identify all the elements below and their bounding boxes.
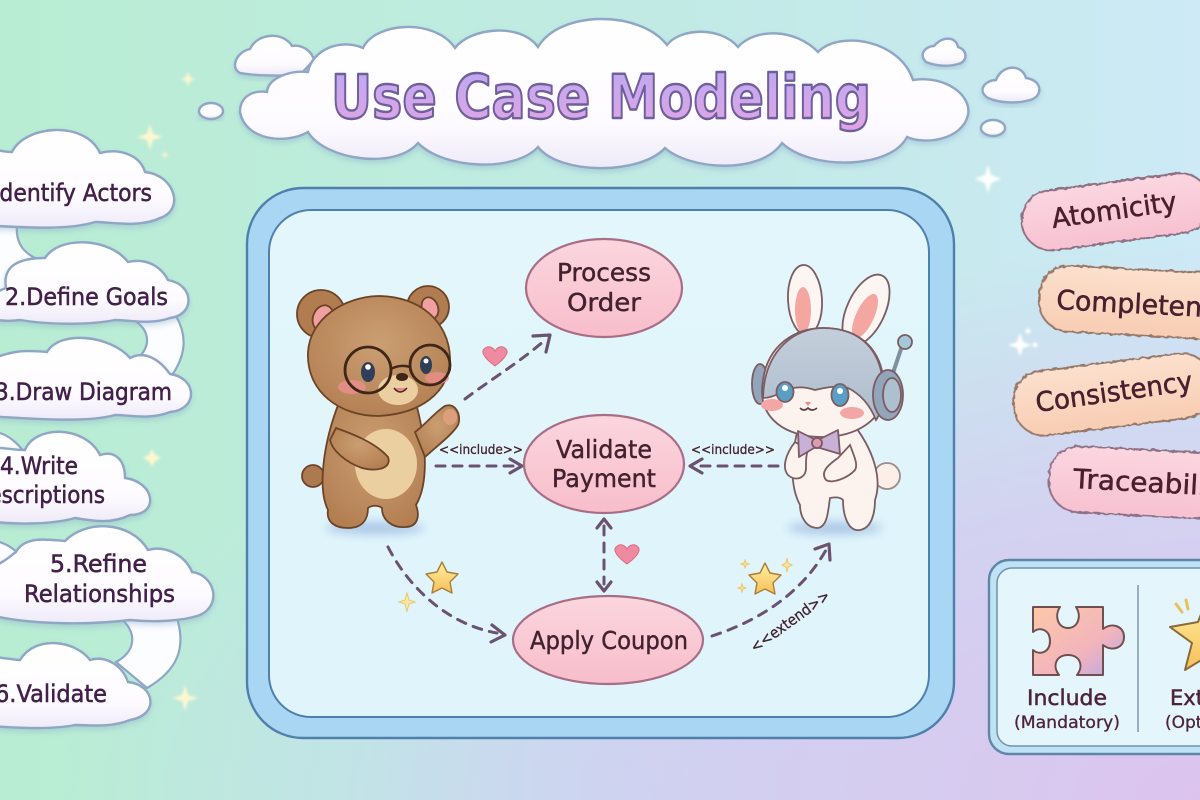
label: extend [1165, 686, 1200, 733]
arrow: validate to coupon, double headed [597, 519, 611, 591]
arrow: bunny include [690, 442, 778, 473]
sparkle: legend star [1176, 600, 1188, 612]
main use case diagram panel [247, 188, 954, 738]
sparkles [137, 72, 1038, 711]
step 3 cloud: Draw Diagram: 3.Draw Diagram [0, 378, 172, 406]
use case: Validate Payment [524, 415, 684, 513]
pill: Consistency [1010, 350, 1200, 439]
arrow: bunny include: <<include>> [691, 442, 775, 458]
arrow: bear to process order [465, 335, 550, 399]
use case: Process Order: Process [557, 258, 651, 287]
label: include: Include [1027, 686, 1107, 710]
title text: Use Case Modeling [331, 62, 871, 133]
use case: Validate Payment: Payment [552, 464, 656, 493]
step 5 cloud: Refine Relationships [0, 526, 213, 623]
label: include [1014, 686, 1120, 733]
actor: bunny robot [752, 264, 912, 534]
process flow connectors [0, 224, 184, 688]
use case: Apply Coupon: Apply Coupon [530, 626, 688, 655]
actor: bear [297, 286, 459, 534]
arrow: bear include: <<include>> [439, 442, 523, 458]
use case: Process Order: Order [567, 288, 642, 317]
pill: Traceability [1047, 445, 1200, 523]
arrow: bear include [436, 442, 523, 473]
use case: Process Order [526, 239, 682, 337]
icon: puzzle piece [1033, 607, 1124, 675]
arrow: bear to apply coupon [388, 547, 505, 642]
step 2 cloud: Define Goals: 2.Define Goals [5, 283, 168, 311]
label: include: (Mandatory) [1014, 713, 1120, 733]
icon: star legend [1170, 596, 1200, 670]
panel: legend [989, 560, 1200, 754]
step 4 cloud: Write Descriptions: 4.Write [0, 452, 78, 480]
step 6 cloud: Validate [0, 643, 150, 728]
arrow: coupon to bunny extend [712, 544, 833, 656]
step 4 cloud: Write Descriptions [0, 432, 150, 524]
panel: quality attributes [1010, 170, 1200, 523]
arrow: coupon to bunny extend: <<extend>> [747, 586, 833, 656]
use case: Validate Payment: Validate [556, 435, 652, 464]
pill: Atomicity [1018, 170, 1200, 254]
step 5 cloud: Refine Relationships: 5.Refine [50, 550, 147, 578]
icon: heart lower [615, 545, 639, 564]
title cloud [240, 19, 968, 168]
icon: star right [749, 563, 781, 594]
icon: heart upper [483, 347, 507, 366]
step 3 cloud: Draw Diagram [0, 338, 191, 420]
pill: Completeness [1037, 264, 1200, 343]
step 5 cloud: Refine Relationships: Relationships [24, 580, 175, 608]
icon: star left [426, 562, 458, 593]
sparkle accents [399, 558, 792, 611]
pill: Consistency: Consistency [1034, 366, 1194, 419]
decorative small clouds [199, 36, 1039, 136]
pill: Atomicity: Atomicity [1050, 187, 1179, 235]
use case: Apply Coupon [513, 596, 703, 684]
step 2 cloud: Define Goals [0, 242, 189, 324]
step 1 cloud: Identify Actors [0, 130, 174, 228]
